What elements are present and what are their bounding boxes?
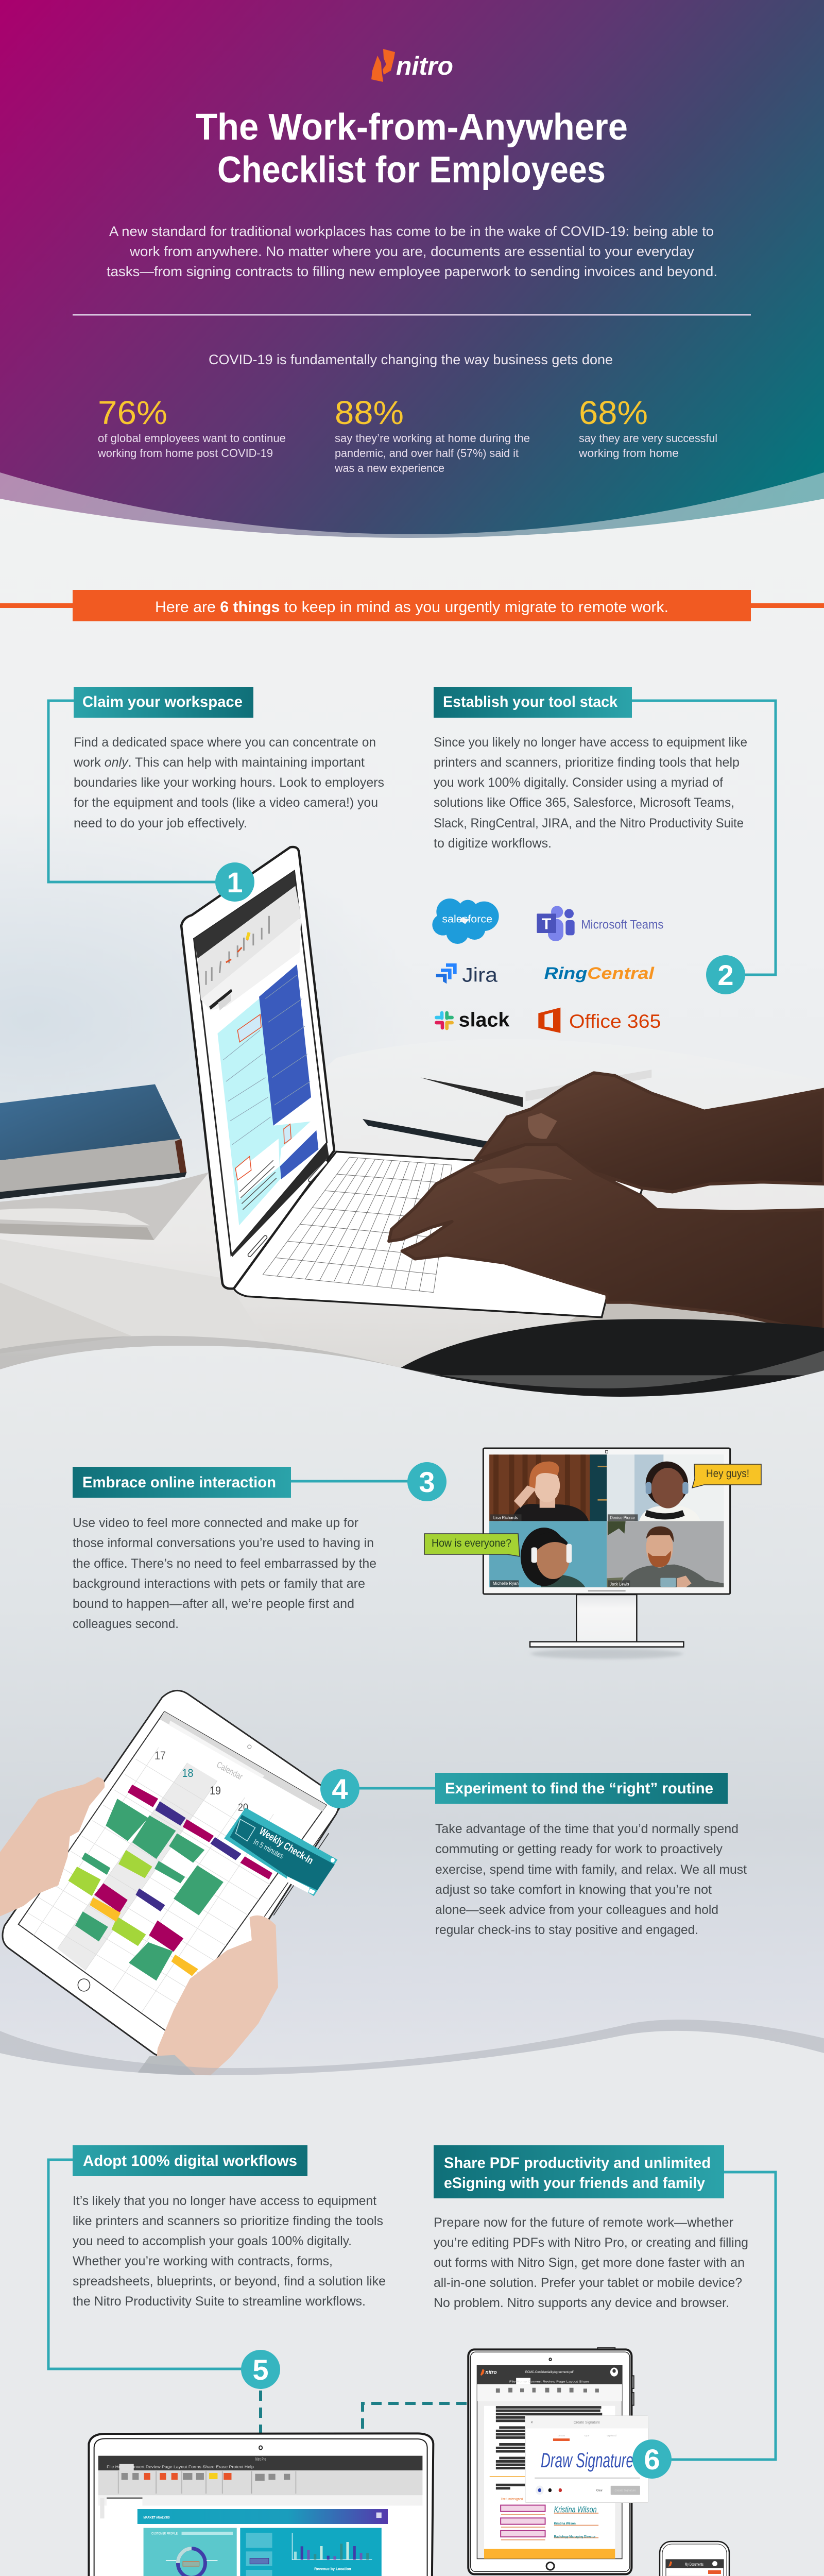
laptop lid bbox=[89, 2433, 433, 2576]
heading: Experiment to find the right routine: Experiment to find the “right” routine bbox=[445, 1780, 713, 1797]
lower hand and arm bbox=[389, 1145, 824, 1334]
reminder popup text: In 5 minutes bbox=[252, 1838, 285, 1861]
logo: RingCentral: RingCentral bbox=[544, 963, 655, 982]
connector 2 bbox=[632, 701, 776, 975]
text: Establish your tool stack: Since you likely no longer have access to equipment like bbox=[434, 735, 747, 750]
title bbox=[196, 107, 628, 191]
subheading: COVID-19 is fundamentally changing the way business gets done bbox=[209, 352, 613, 367]
orange banner: Here are 6 things to keep in mind as you urgently migrate to remote work. bbox=[155, 599, 668, 616]
agreement document bbox=[484, 2406, 615, 2559]
tablet shadow bbox=[469, 2573, 631, 2576]
Nitro Pro window: File Home Convert Review Page Layout Forms Share Erase Protect Help bbox=[107, 2465, 254, 2469]
intro paragraph: tasks—from signing contracts to filling new employee paperwork to sending invoices and beyond. bbox=[107, 264, 717, 279]
phone bbox=[660, 2541, 729, 2576]
heading: Embrace online interaction: Embrace online interaction bbox=[82, 1474, 276, 1491]
heading: Embrace online interaction bbox=[73, 1467, 291, 1498]
heading: Share PDF productivity bbox=[434, 2145, 724, 2198]
text: Experiment routine: Take advantage of the time that you’d normally spend bbox=[435, 1822, 739, 1836]
heading: Claim your workspace: Claim your workspace bbox=[82, 693, 243, 710]
monitor frame bbox=[483, 1448, 730, 1594]
phone: My Documents bbox=[685, 2562, 703, 2567]
text: Establish your tool stack: printers and scanners, prioritize finding tools that help bbox=[434, 755, 740, 770]
video tile: Denise Pierce: Denise Pierce bbox=[610, 1515, 635, 1520]
heading: Establish your tool stack: Establish your tool stack bbox=[443, 693, 617, 710]
text: Claim your workspace: boundaries like your working hours. Look to employers bbox=[74, 775, 384, 790]
calendar screen: Calendar bbox=[215, 1759, 244, 1782]
text: Adopt 100% digital workflows bbox=[73, 2194, 386, 2309]
stat: 76%: of global employees want to continue bbox=[98, 432, 286, 445]
text: Adopt 100% digital workflows: the Nitro Productivity Suite to streamline workflows. bbox=[73, 2294, 366, 2309]
left hand bbox=[0, 1778, 104, 1916]
signature dialog bbox=[525, 2416, 648, 2503]
text: Embrace online interaction: background interactions with pets or family that are bbox=[73, 1577, 365, 1591]
text: Embrace online interaction: those informal conversations you’re used to having in bbox=[73, 1536, 374, 1550]
text: Establish your tool stack: to digitize workflows. bbox=[434, 836, 552, 851]
monitor shadow bbox=[531, 1649, 683, 1659]
photo section background: wall bbox=[0, 453, 824, 1412]
text: Embrace online interaction: Use video to feel more connected and make up for bbox=[73, 1516, 358, 1530]
calendar screen: 17 bbox=[154, 1750, 166, 1762]
text: Share PDF productivity: No problem. Nitro supports any device and browser. bbox=[434, 2296, 729, 2310]
tablet app screen: The Undersigned bbox=[501, 2497, 523, 2501]
signature dialog: Create Signature bbox=[574, 2421, 600, 2425]
signature dialog: × bbox=[530, 2419, 533, 2425]
stat: 88%: say they’re working at home during the bbox=[335, 432, 530, 445]
signature dialog: Clear bbox=[596, 2489, 603, 2493]
text: Adopt 100% digital workflows: spreadsheets, blueprints, or beyond, find a solution like bbox=[73, 2274, 386, 2289]
Nitro Pro window: CUSTOMER PROFILE bbox=[151, 2531, 178, 2535]
reminder popup text bbox=[252, 1825, 315, 1867]
section 3-4 background bbox=[0, 1346, 824, 2081]
text: Claim your workspace: Find a dedicated space where you can concentrate on bbox=[74, 735, 376, 750]
number badge 5 bbox=[241, 2350, 280, 2389]
text: Adopt 100% digital workflows: Whether you’re working with contracts, forms, bbox=[73, 2254, 333, 2268]
logo: nitro header bbox=[371, 49, 453, 82]
text: Share PDF productivity bbox=[434, 2215, 748, 2310]
video tile: Lisa Richards: Lisa Richards bbox=[493, 1515, 518, 1520]
sleeve and watch bbox=[135, 2055, 202, 2081]
speech bubble: Hey guys bbox=[692, 1464, 761, 1488]
text: Share PDF productivity: you’re editing PDFs with Nitro Pro, or creating and filling bbox=[434, 2235, 748, 2250]
laptop deck bbox=[233, 1151, 644, 1317]
text: Share PDF productivity: out forms with Nitro Sign, get more done faster with an bbox=[434, 2256, 745, 2270]
video tile: Jack Lewis: Jack Lewis bbox=[610, 1582, 629, 1587]
heading: Establish your tool stack bbox=[434, 687, 632, 718]
heading: Adopt 100% digital workflows: Adopt 100% digital workflows bbox=[83, 2153, 297, 2170]
text: Share PDF productivity: all-in-one solution. Prefer your tablet or mobile device? bbox=[434, 2276, 742, 2290]
stat: 76%: 76% bbox=[98, 394, 167, 431]
tablet frame bbox=[468, 2349, 631, 2574]
video tile: Michelle Ryan bbox=[489, 1521, 607, 1587]
text: Establish your tool stack bbox=[434, 735, 747, 851]
number badge 3: 3 bbox=[419, 1466, 435, 1498]
document header bbox=[138, 2509, 388, 2524]
Nitro Pro window: Nitro Pro bbox=[255, 2458, 266, 2462]
speech bubble: How is everyone bbox=[424, 1534, 520, 1556]
calendar events bbox=[68, 1785, 272, 1980]
heading: Experiment to find the right routine bbox=[435, 1773, 728, 1804]
text: Adopt 100% digital workflows: It’s likely that you no longer have access to equipment bbox=[73, 2194, 376, 2208]
logo: Microsoft Teams bbox=[537, 906, 663, 941]
laptop lid bbox=[181, 847, 334, 1289]
text: Establish your tool stack: you work 100% digitally. Consider using a myriad of bbox=[434, 775, 723, 790]
number badge 2 bbox=[706, 955, 745, 994]
number badge 5: 5 bbox=[252, 2353, 269, 2386]
signature dialog: Draw bbox=[558, 2434, 565, 2437]
text: Claim your workspace: need to do your job effectively. bbox=[74, 816, 247, 831]
connector 1 bbox=[48, 701, 235, 882]
header lower translucent wave bbox=[0, 464, 824, 538]
text: Adopt 100% digital workflows: you need to accomplish your goals 100% digitally. bbox=[73, 2234, 352, 2248]
tablet app screen bbox=[477, 2365, 622, 2559]
revenue panel bbox=[240, 2528, 382, 2576]
stat: 68%: 68% bbox=[579, 394, 648, 431]
stat: 88%: 88% bbox=[335, 394, 404, 431]
text: Experiment routine: regular check-ins to stay positive and engaged. bbox=[435, 1923, 698, 1937]
stat: 68%: say they are very successful bbox=[579, 432, 717, 445]
speech bubble: How is everyone: How is everyone? bbox=[432, 1537, 511, 1549]
lower section background bbox=[0, 2087, 824, 2576]
photo: desk, books, laptop and hands bbox=[0, 847, 824, 1405]
calendar screen bbox=[19, 1711, 327, 2030]
number badge 2: 2 bbox=[717, 959, 734, 991]
text: Claim your workspace: work only. This can help with maintaining important bbox=[73, 755, 365, 770]
wave: lower section divider bbox=[0, 2020, 824, 2103]
stylus bbox=[213, 1955, 255, 2016]
logo: Salesforce: salesforce bbox=[442, 913, 492, 925]
number badge 4: 4 bbox=[332, 1773, 348, 1805]
text: Adopt 100% digital workflows: like printers and scanners so prioritize finding the tools bbox=[73, 2214, 383, 2228]
text: Experiment routine: commuting or getting ready for work to proactively bbox=[435, 1842, 723, 1856]
logo: Office 365 bbox=[538, 1008, 661, 1033]
camera dot bbox=[606, 1450, 608, 1453]
logo: Microsoft Teams: T bbox=[542, 915, 552, 933]
logo: Salesforce bbox=[432, 899, 499, 944]
tablet app screen: Radiology Managing Director bbox=[554, 2535, 596, 2538]
heading: Adopt 100% digital workflows bbox=[73, 2145, 307, 2176]
stat: 88% bbox=[334, 394, 530, 474]
laptop screen bbox=[194, 871, 329, 1257]
text: Experiment routine bbox=[435, 1822, 747, 1937]
logo: Jira: Jira bbox=[462, 963, 497, 986]
tablet app screen: nitro bbox=[485, 2370, 497, 2376]
connector 6 bbox=[652, 2172, 776, 2460]
text: Claim your workspace bbox=[73, 735, 384, 831]
text: Establish your tool stack: solutions like Office 365, Salesforce, Microsoft Teams, bbox=[434, 795, 734, 810]
text: Share PDF productivity: Prepare now for the future of remote work—whether bbox=[434, 2215, 733, 2230]
number badge 4 bbox=[320, 1769, 359, 1808]
video tile: Lisa Richards bbox=[489, 1454, 607, 1521]
logo: Microsoft Teams: Microsoft Teams bbox=[581, 918, 663, 932]
tablet app screen: ECMC-ConfidentialityAgreement.pdf bbox=[525, 2371, 574, 2374]
tool logos bbox=[432, 899, 663, 1033]
pencil bbox=[363, 1119, 494, 1149]
stat: 76%: working from home post COVID-19 bbox=[97, 447, 273, 460]
dashed connectors between devices bbox=[261, 2391, 658, 2576]
number badge 6 bbox=[632, 2439, 672, 2479]
stat: 76% bbox=[97, 394, 286, 460]
Nitro Pro window bbox=[98, 2456, 422, 2576]
text: Claim your workspace: for the equipment and tools (like a video camera!) you bbox=[74, 795, 378, 810]
drawn signature: Draw Signature bbox=[541, 2449, 633, 2472]
logo: Slack bbox=[435, 1009, 509, 1031]
monitor with video call bbox=[483, 1448, 730, 1659]
text: Experiment routine: exercise, spend time with family, and relax. We all must bbox=[435, 1862, 747, 1877]
customer profile panel bbox=[144, 2528, 237, 2576]
tablet with signature dialog bbox=[468, 2348, 648, 2576]
stat: 68% bbox=[578, 394, 717, 460]
video tile: Jack Lewis bbox=[607, 1521, 724, 1587]
wave: grey band over photo bbox=[0, 1336, 824, 1388]
hinge bbox=[250, 1162, 326, 1255]
logo: nitro header: nitro bbox=[396, 52, 453, 80]
intro paragraph: A new standard for traditional workplaces has come to be in the wake of COVID-19: being able to bbox=[109, 224, 714, 239]
number badge 6: 6 bbox=[644, 2443, 660, 2476]
tablet body bbox=[3, 1690, 339, 2059]
text: Experiment routine: alone—seek advice from your colleagues and hold bbox=[435, 1903, 718, 1917]
connector 3 bbox=[291, 1480, 427, 1483]
orange banner bbox=[0, 590, 824, 621]
video tile: Michelle Ryan: Michelle Ryan bbox=[493, 1581, 519, 1586]
intro paragraph bbox=[107, 224, 717, 279]
text: Embrace online interaction: colleagues second. bbox=[73, 1617, 179, 1631]
tablet app screen: Kristina Wilson bbox=[554, 2505, 597, 2515]
monitor stand bbox=[576, 1595, 637, 1642]
keyboard keys bbox=[263, 1157, 452, 1293]
stat: 88%: was a new experience bbox=[334, 462, 444, 474]
text: Experiment routine: adjust so take comfort in knowing that you’re not bbox=[435, 1883, 712, 1897]
calendar screen: 18 bbox=[182, 1767, 193, 1780]
number badge 1: 1 bbox=[227, 866, 243, 899]
Nitro Pro window: MARKET ANALYSIS bbox=[144, 2515, 170, 2519]
connector 4 bbox=[340, 1787, 435, 1790]
video tile: Denise Pierce bbox=[607, 1454, 724, 1521]
tablet with calendar held in hands bbox=[0, 1690, 340, 2081]
logo: Jira bbox=[436, 963, 497, 986]
signature dialog: Create Signature bbox=[615, 2489, 636, 2493]
tablet app screen: File Home Convert Review Page Layout Share bbox=[509, 2380, 590, 2384]
signature dialog: Type bbox=[584, 2434, 590, 2437]
upper hand and arm bbox=[475, 1073, 824, 1192]
tablet app screen: Kristina Wilson bbox=[554, 2522, 576, 2526]
table surface bbox=[0, 1039, 824, 1405]
calendar screen: 20 bbox=[238, 1802, 248, 1814]
connector 5 bbox=[48, 2160, 261, 2369]
intro paragraph: work from anywhere. No matter where you are, documents are essential to your everyday bbox=[129, 244, 695, 259]
text: Embrace online interaction: the office. There’s no need to feel embarrassed by the bbox=[73, 1556, 376, 1571]
stack of books bbox=[0, 1084, 209, 1240]
spiral notebook bbox=[420, 1078, 523, 1107]
text: Establish your tool stack: Slack, RingCentral, JIRA, and the Nitro Productivity Suite bbox=[434, 816, 744, 831]
title: Checklist for Employees bbox=[217, 149, 606, 191]
header main gradient bbox=[0, 0, 824, 534]
number badge 3 bbox=[407, 1462, 447, 1501]
number badge 1 bbox=[215, 862, 254, 902]
logo: Slack: slack bbox=[459, 1009, 509, 1031]
Nitro Pro window: Revenue by Location bbox=[314, 2567, 351, 2571]
heading: Share PDF productivity: eSigning with your friends and family bbox=[444, 2175, 705, 2192]
heading: Claim your workspace bbox=[74, 687, 253, 718]
stat: 68%: working from home bbox=[578, 447, 679, 460]
right hand bbox=[157, 1917, 277, 2081]
text: Embrace online interaction: bound to happen—after all, we’re people first and bbox=[73, 1597, 354, 1611]
laptop with Nitro Pro bbox=[65, 2433, 455, 2576]
dark chair bbox=[389, 1319, 824, 1405]
speech bubble: Hey guys: Hey guys! bbox=[706, 1468, 749, 1480]
title: The Work-from-Anywhere bbox=[196, 107, 628, 148]
signature dialog: Upload bbox=[607, 2434, 616, 2437]
text: Embrace online interaction bbox=[73, 1516, 376, 1631]
reminder popup bbox=[224, 1808, 337, 1896]
calendar screen: 19 bbox=[210, 1785, 221, 1797]
reminder popup text: Weekly Check-In bbox=[257, 1825, 315, 1867]
logo: Office 365: Office 365 bbox=[569, 1010, 661, 1032]
stat: 88%: pandemic, and over half (57%) said it bbox=[335, 447, 519, 460]
heading: Share PDF productivity: Share PDF productivity and unlimited bbox=[444, 2155, 711, 2172]
